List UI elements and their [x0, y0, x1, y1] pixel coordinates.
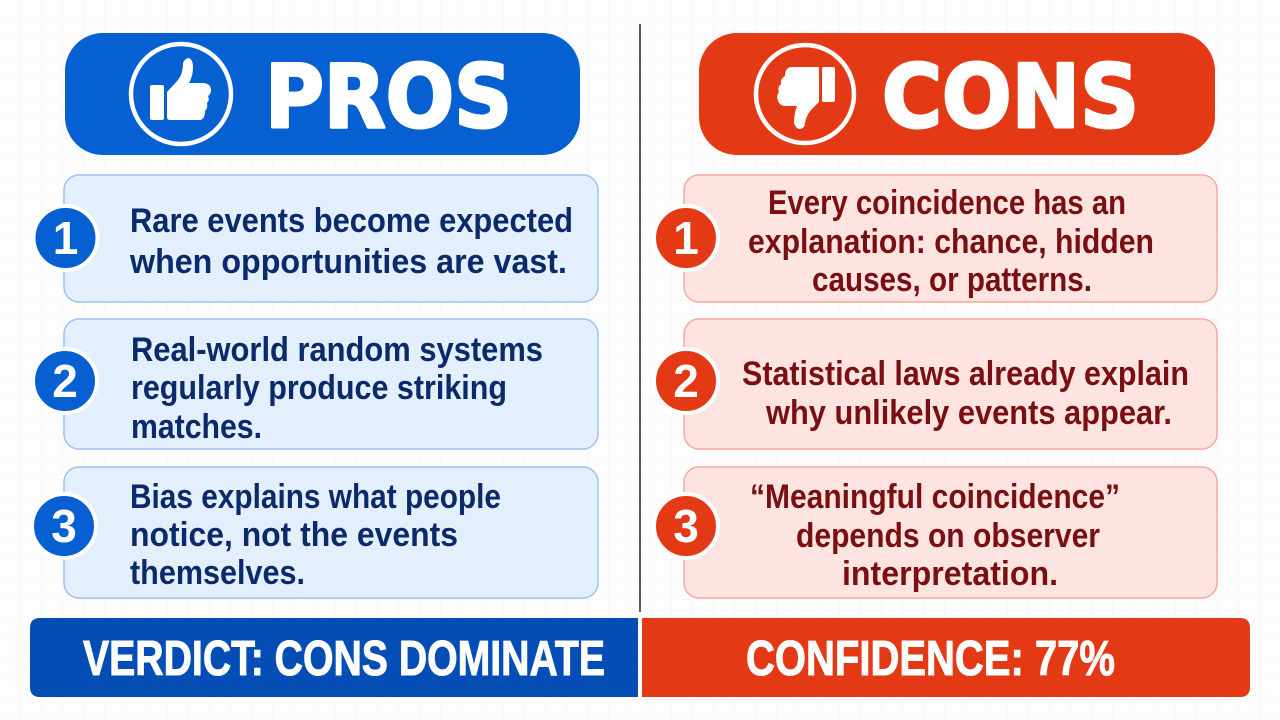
icon: thumbs down	[756, 45, 854, 143]
text: causes, or patterns.	[812, 261, 1092, 299]
number badge 3: 3	[673, 500, 699, 552]
icon: thumbs up	[131, 44, 231, 144]
text	[742, 355, 1189, 432]
heading: cons: CONS	[882, 46, 1139, 148]
number badge 2: 2	[52, 355, 78, 407]
text: “Meaningful coincidence”	[750, 478, 1120, 516]
text	[748, 184, 1154, 299]
pros item 1	[34, 175, 598, 302]
number badge 3	[654, 494, 718, 558]
text	[129, 202, 573, 281]
text: depends on observer	[796, 517, 1100, 555]
cons item 1	[654, 175, 1217, 302]
pros item 2	[33, 319, 598, 449]
text	[130, 478, 501, 592]
text	[131, 331, 543, 446]
text: matches.	[131, 408, 262, 446]
number badge 1: 1	[673, 212, 699, 264]
text: Every coincidence has an	[768, 184, 1126, 222]
pros item 3	[32, 467, 598, 598]
verdict banner	[30, 618, 638, 697]
number badge 1: 1	[53, 212, 78, 264]
verdict text: VERDICT: CONS DOMINATE	[83, 632, 605, 686]
text: notice, not the events	[130, 516, 458, 554]
heading: pros: PROS	[265, 46, 512, 148]
number badge 3	[32, 494, 96, 558]
text	[750, 478, 1120, 593]
pros header	[65, 33, 580, 155]
cons header	[699, 33, 1215, 155]
text: Real-world random systems	[131, 331, 543, 369]
text: when opportunities are vast.	[129, 243, 567, 281]
number badge 1	[654, 206, 718, 270]
text: regularly produce striking	[131, 369, 507, 407]
confidence text: CONFIDENCE: 77%	[746, 632, 1115, 686]
cons item 3	[654, 467, 1217, 598]
text: Rare events become expected	[130, 202, 573, 240]
text: why unlikely events appear.	[765, 394, 1172, 432]
cons item 2	[654, 319, 1217, 449]
number badge 2	[654, 349, 718, 413]
number badge 1	[34, 206, 98, 270]
number badge 2	[33, 349, 97, 413]
text: interpretation.	[842, 555, 1058, 593]
text: Bias explains what people	[130, 478, 501, 516]
text: explanation: chance, hidden	[748, 223, 1154, 261]
text: themselves.	[130, 554, 305, 592]
text: Statistical laws already explain	[742, 355, 1189, 393]
number badge 2: 2	[673, 355, 699, 407]
number badge 3: 3	[51, 500, 77, 552]
confidence banner	[642, 618, 1250, 697]
